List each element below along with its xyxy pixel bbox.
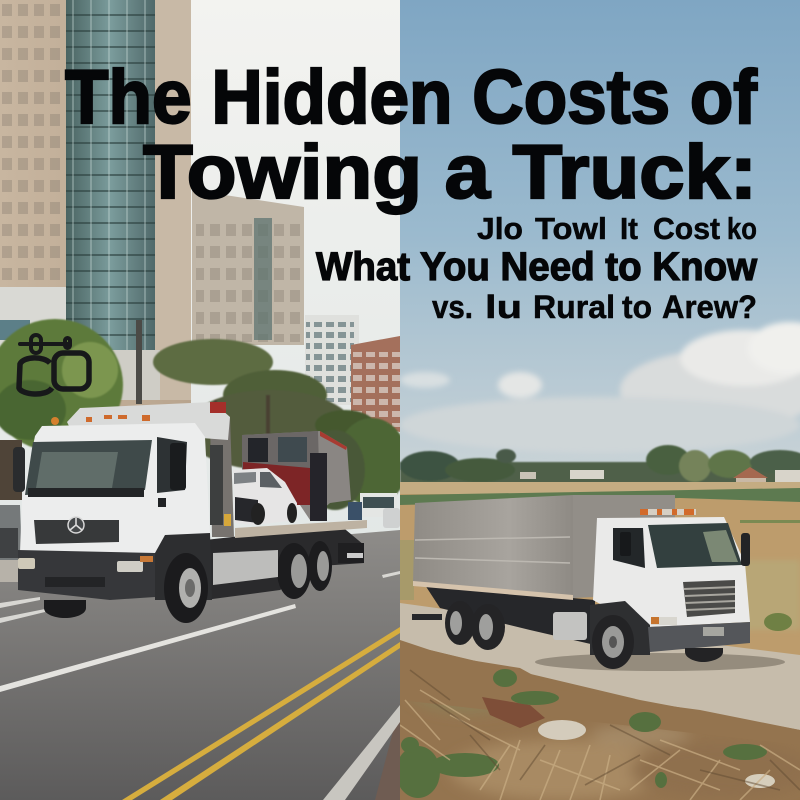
white cab [20,423,210,553]
chassis [425,585,595,645]
front wheels [592,615,723,669]
headache rack [210,417,234,537]
bumper [18,550,155,600]
subtitle line: rural comparison: Rural [533,289,615,325]
grille and logo [34,517,119,544]
subtitle line: cost question: Towl [535,211,607,246]
farm fields [400,482,800,657]
towed white car [233,468,297,525]
subtitle line: rural comparison: Arew? [662,289,757,325]
subtitle line: cost question [477,211,757,246]
subtitle line: cost question: Jlo [477,211,523,246]
title: Towing a Truck: [143,130,757,215]
far front wheel [44,600,86,618]
subtitle line: rural comparison: to [622,289,652,325]
box truck [412,495,785,671]
roadside vegetation and debris [396,640,800,800]
truck shadow [535,653,785,671]
red brick building [351,336,400,432]
glass tower [66,0,155,385]
rear wheels [277,541,332,599]
subtitle line: what you need to know: What You Need to Know [316,245,758,289]
low white building [0,287,160,400]
windshield [648,523,742,568]
brush foreground [400,652,800,800]
bumper [648,617,750,652]
mid-rise building [192,190,304,345]
rear wheels [445,601,505,650]
subtitle line: rural comparison [432,289,757,325]
clouds [400,322,800,453]
cab roof fairing [67,402,230,440]
side window and mirror [613,528,750,568]
towed red truck [242,431,351,521]
cargo box front [573,495,675,598]
front wheel arch [590,601,650,655]
distant tree line and farmhouses [400,445,800,484]
amber light bar [640,509,696,515]
panel: urban street scene [0,0,408,800]
reflective strip [413,581,573,600]
distant bus and car [348,493,400,528]
title [65,55,758,215]
white apartment building [305,315,359,405]
roadside building and parked car [0,440,22,560]
cargo box side [413,495,573,598]
lane markings [0,571,400,800]
urban sky [0,0,400,560]
subtitle line: cost question: It [620,211,638,246]
grille [683,580,735,617]
subtitle line: rural comparison: lu [485,289,522,325]
flatbed [235,520,367,538]
windshield [25,440,152,495]
chassis and underbody [210,530,364,599]
tow truck with loaded vehicles [13,402,367,623]
subtitle line: rural comparison: vs. [432,289,473,325]
asphalt road [0,530,400,800]
fuel tank [553,612,587,640]
dark front wheel arch [155,533,212,600]
rural sky [400,0,800,470]
rear bumper guard [338,543,364,563]
icon: chain links [19,335,89,394]
tall tan building [0,0,191,420]
front wheel [164,553,208,623]
fuel tank [213,550,278,585]
dirt road [400,603,800,730]
utility pole [136,320,142,404]
side window and mirror [13,437,187,507]
subtitle line: cost question: Cost [653,211,720,246]
white cab [593,517,750,627]
street trees [0,319,408,510]
amber roof lights [51,415,150,425]
panel: rural road scene [396,0,800,800]
roadside bush [764,613,792,631]
subtitle line: cost question: ko [727,211,757,246]
title: The Hidden Costs of [65,55,758,140]
